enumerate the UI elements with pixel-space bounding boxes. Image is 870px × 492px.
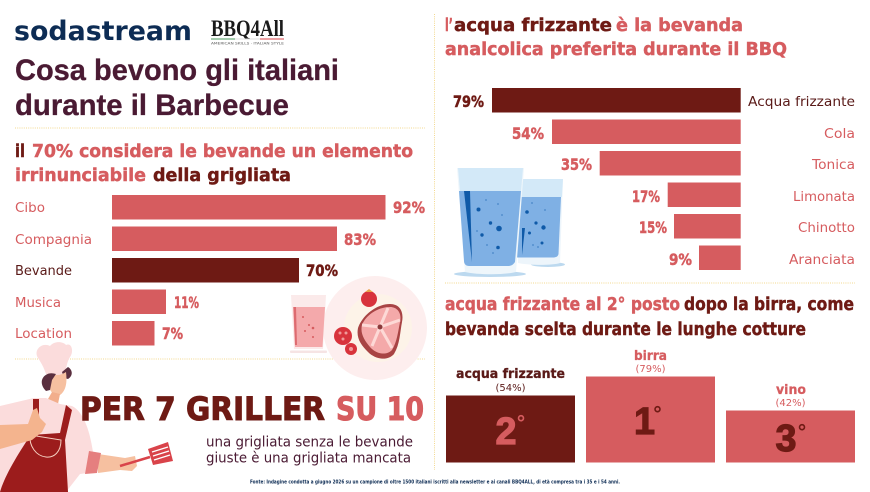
apron pocket	[30, 435, 61, 457]
podium: birra 1°	[586, 348, 715, 462]
bar: Compagnia 83%: 83%	[344, 230, 376, 249]
chef left arm	[0, 408, 46, 449]
bar: Aranciata 9%: Aranciata	[789, 252, 855, 268]
bar: Compagnia 83%: Compagnia	[15, 232, 92, 248]
chef head	[42, 367, 72, 404]
bar: Chinotto 15%: 15%	[639, 218, 667, 237]
text block: una grigliata senza le bevande	[206, 434, 413, 466]
chef hat	[37, 342, 72, 375]
bar: Chinotto 15%	[639, 214, 855, 238]
illustration: chef with spatula	[0, 342, 173, 492]
podium: acqua frizzante 2°: °	[516, 411, 526, 435]
title: durante il Barbecue	[15, 89, 289, 122]
heading: l'acqua frizzante: l’	[445, 15, 453, 36]
bar: Location 7%	[15, 321, 183, 346]
bar: Cibo 92%: Cibo	[15, 200, 45, 216]
bar: Cola 54%: Cola	[824, 126, 855, 142]
podium: acqua frizzante 2°	[446, 366, 575, 462]
bar: Musica 11%: 11%	[174, 293, 199, 312]
bar: Acqua frizzante 79%: 79%	[453, 92, 484, 111]
spatula	[120, 442, 173, 466]
bar: Compagnia 83%	[15, 226, 376, 251]
podium: acqua frizzante 2°: acqua frizzante	[456, 366, 565, 382]
bar: Cibo 92%	[15, 195, 425, 220]
logo: sodastream: sodastream	[14, 16, 192, 47]
chef torso	[0, 398, 96, 492]
bar chart: bevande analcoliche	[453, 88, 855, 270]
logo: BBQ4All: BBQ4All	[211, 16, 284, 41]
chef right arm	[98, 454, 137, 473]
bar: Chinotto 15%: Chinotto	[798, 220, 855, 236]
bar: Bevande 70%: 70%	[306, 261, 338, 280]
bar: Tonica 35%	[561, 151, 855, 176]
heading: acqua frizzante al 2° posto: acqua frizzante al 2° posto	[445, 294, 680, 315]
bar: Cola 54%	[512, 120, 855, 144]
bar: Aranciata 9%: 9%	[669, 250, 692, 269]
podium: birra 1°: °	[652, 402, 662, 426]
cuff	[85, 451, 101, 474]
podium: vino 3°: 3	[776, 418, 796, 460]
podium: acqua frizzante 2°: 2	[496, 411, 516, 453]
heading: l'acqua frizzante: è la bevanda	[616, 15, 743, 36]
heading: il 70% considera le bevande	[15, 141, 413, 186]
bar: Tonica 35%: Tonica	[811, 157, 855, 173]
bar: Tonica 35%: 35%	[561, 155, 592, 174]
footnote: Fonte: Indagine condotta a giugno 2026 su un campione di oltre 1500 italiani iscritti alla newsletter e ai canali BBQ4ALL, di età compresa tra i 35 e i 54 anni.	[250, 478, 620, 486]
bar: Limonata 17%	[632, 182, 855, 207]
podium chart	[446, 348, 855, 462]
bar: Musica 11%: Musica	[15, 295, 61, 311]
podium: vino 3°: °	[797, 420, 807, 444]
heading: acqua frizzante al 2° posto	[445, 294, 854, 340]
chef apron	[0, 399, 72, 492]
bar: Limonata 17%: 17%	[632, 187, 660, 206]
bar chart: elementi della grigliata	[15, 195, 425, 346]
bar: Bevande 70%	[15, 258, 338, 282]
bar: Limonata 17%: Limonata	[793, 189, 855, 205]
heading: acqua frizzante al 2° posto: bevanda scelta durante le lunghe cotture	[445, 319, 806, 340]
heading: il 70% considera le bevande: irrinunciabile	[15, 165, 146, 186]
bar: Acqua frizzante 79%: Acqua frizzante	[748, 94, 855, 110]
text block: una grigliata senza le bevande: giuste è una grigliata mancata	[206, 450, 411, 466]
text block: una grigliata senza le bevande: una grigliata senza le bevande	[206, 434, 413, 450]
heading: il 70% considera le bevande: della grigliata	[153, 165, 291, 186]
podium: birra 1°: (79%)	[635, 364, 666, 375]
heading: l'acqua frizzante: acqua frizzante	[454, 15, 612, 36]
podium: vino 3°	[726, 382, 855, 462]
icon: meat plate and pink drink	[290, 276, 427, 380]
bar: Bevande 70%: Bevande	[15, 263, 72, 279]
callout: per 7 griller su 10: SU 10	[336, 390, 424, 428]
podium: vino 3°: vino	[776, 382, 806, 398]
callout: per 7 griller su 10: PER 7 GRILLER	[80, 390, 325, 428]
title: Cosa bevono gli italiani	[15, 54, 339, 87]
bar: Cola 54%: 54%	[512, 124, 544, 143]
bar: Musica 11%	[15, 290, 199, 314]
bar: Location 7%: 7%	[162, 324, 183, 343]
heading: il 70% considera le bevande: il	[15, 141, 25, 162]
bar: Location 7%: Location	[15, 326, 72, 342]
icon: glasses of sparkling water	[454, 168, 565, 277]
podium: birra 1°: 1	[634, 401, 655, 443]
logo: BBQ4All: AMERICAN SKILLS · ITALIAN STYLE	[211, 42, 284, 46]
podium: vino 3°: (42%)	[775, 398, 806, 409]
podium: acqua frizzante 2°: (54%)	[495, 383, 526, 394]
heading: l'acqua frizzante: analcolica preferita durante il BBQ	[445, 39, 787, 60]
title	[15, 54, 339, 122]
heading: l'acqua frizzante	[445, 15, 787, 60]
podium: birra 1°: birra	[634, 348, 667, 364]
bar: Cibo 92%: 92%	[393, 198, 425, 217]
bar: Acqua frizzante 79%	[453, 88, 855, 112]
heading: il 70% considera le bevande: 70% considera le bevande un elemento	[32, 141, 413, 162]
bar: Aranciata 9%	[669, 246, 855, 270]
